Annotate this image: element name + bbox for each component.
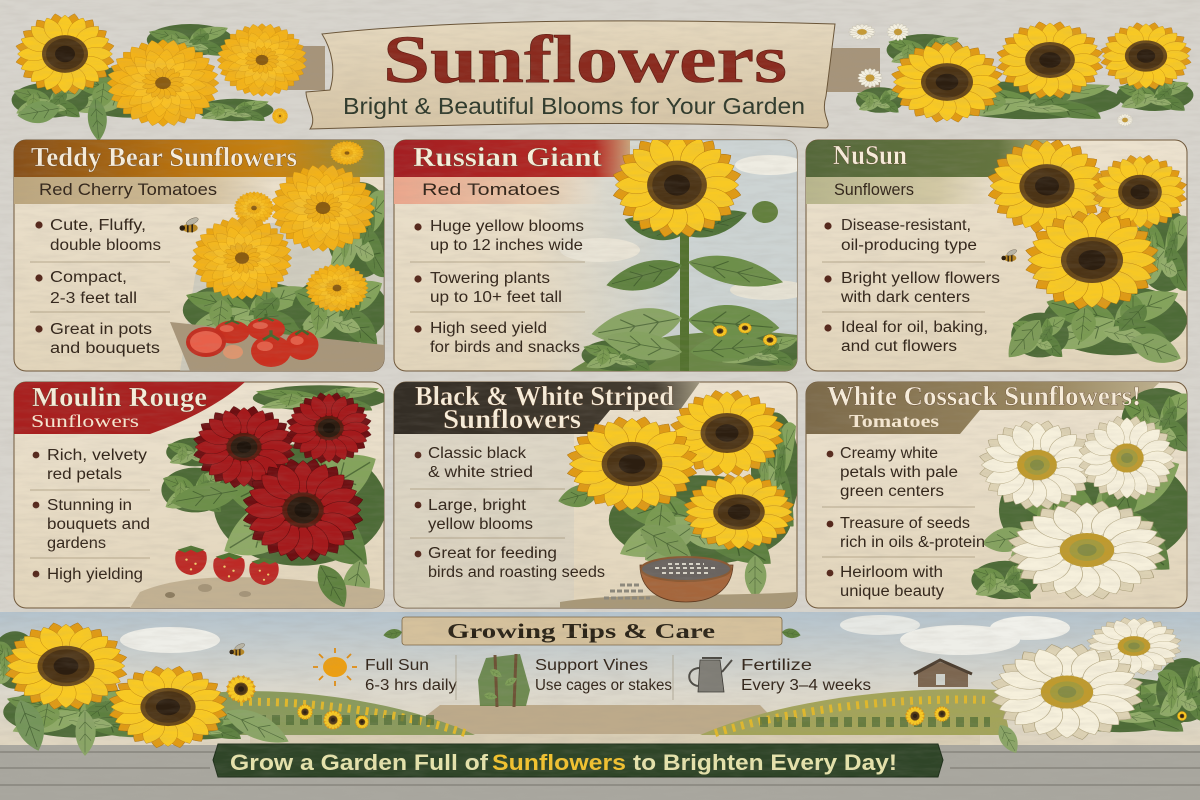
bullet list: Great in pots [50, 321, 152, 338]
bullet list: Large, bright [428, 497, 527, 514]
icon: trellis [478, 654, 530, 707]
bullet list [822, 217, 1000, 355]
bullet list: up to 12 inches wide [430, 237, 583, 254]
heading: Teddy Bear Sunflowers [31, 142, 297, 172]
panel: Teddy Bear Sunflowers [14, 139, 394, 371]
footer banner: to Brighten Every Day! [633, 750, 897, 775]
bullet list: red petals [47, 466, 122, 483]
bullet list: Towering plants [430, 270, 550, 287]
bullet list: Ideal for oil, baking, [841, 319, 988, 336]
subheading: Red Cherry Tomatoes [39, 181, 217, 199]
illustration: teddy bear blooms [170, 139, 394, 371]
bullet list: Stunning in [47, 497, 132, 514]
bullet list: Great for feeding [428, 545, 557, 562]
top-left sunflower cluster [6, 6, 315, 142]
bullet list [30, 447, 150, 583]
tip: fertilize: Every 3–4 weeks [741, 677, 871, 694]
bullet list [410, 445, 605, 581]
garden scene: growing tips backdrop [0, 612, 1200, 747]
tip: full sun [313, 648, 457, 694]
bullet list: oil-producing type [841, 237, 977, 254]
header band [14, 382, 245, 434]
bullet list: with dark centers [840, 289, 970, 306]
icon: watering can [689, 658, 732, 692]
bottom-right white flowers [977, 612, 1200, 757]
tip: full sun: 6-3 hrs daily [365, 677, 457, 694]
header band [806, 382, 1160, 434]
subheading: Sunflowers [31, 411, 139, 431]
bullet list: Bright yellow flowers [841, 270, 1000, 287]
bullet list: High yielding [47, 566, 143, 583]
bullet list: Rich, velvety [47, 447, 147, 464]
bullet list: Disease-resistant, [841, 217, 971, 234]
subheading: Sunflowers [834, 181, 914, 199]
bullet list: up to 10+ feet tall [430, 289, 562, 306]
subtitle: Bright & Beautiful Blooms for Your Garden [343, 93, 805, 119]
panel: Moulin Rouge [14, 382, 387, 616]
bullet list: 2-3 feet tall [50, 290, 137, 307]
illustration: white blooms [971, 388, 1187, 600]
top-right sunflower cluster [848, 14, 1200, 130]
header band [394, 382, 700, 434]
tip: full sun: Full Sun [365, 657, 429, 674]
bullet list [410, 218, 585, 356]
heading: Moulin Rouge [32, 382, 207, 412]
bullet list [30, 217, 170, 357]
bullet list: Heirloom with [840, 564, 943, 581]
tip: fertilize: Fertilize [741, 657, 812, 674]
heading: NuSun [833, 140, 907, 170]
tip: fertilize [689, 657, 871, 694]
wooden posts behind title banner [285, 46, 880, 92]
illustration: red blooms [130, 384, 387, 616]
bullet list: Huge yellow blooms [430, 218, 584, 235]
panel: Russian Giant [394, 140, 798, 372]
subheading: Tomatoes [849, 411, 939, 431]
footer banner: Grow a Garden Full of [230, 750, 489, 775]
banner plank [306, 21, 835, 129]
icon: sun [313, 648, 357, 686]
heading: Russian Giant [413, 142, 602, 172]
panel: NuSun [806, 130, 1196, 371]
bullet list: unique beauty [840, 583, 944, 600]
tips heading board [383, 617, 801, 645]
panel: Black & White Striped [394, 381, 805, 608]
bullet list: and bouquets [50, 340, 160, 357]
bullet list: double blooms [50, 237, 161, 254]
bullet list: High seed yield [430, 320, 547, 337]
tip: support vines: Support Vines [535, 657, 648, 674]
bullet list: birds and roasting seeds [428, 564, 605, 581]
heading: White Cossack Sunflowers! [827, 381, 1141, 411]
bullet list: Cute, Fluffy, [50, 217, 146, 234]
bottom-left sunflowers [0, 614, 294, 756]
seed bowl [640, 565, 733, 602]
bullet list: gardens [47, 535, 106, 552]
bullet list: for birds and snacks [430, 339, 580, 356]
header band [394, 140, 630, 177]
tips heading board: Growing Tips & Care [447, 619, 715, 643]
icon: farmhouse [914, 660, 972, 687]
bullet list: green centers [840, 483, 944, 500]
tip: support vines: Use cages or stakes [535, 677, 672, 694]
panel: White Cossack Sunflowers [806, 381, 1198, 609]
header band [806, 140, 1046, 177]
bullet list: & white stried [428, 464, 533, 481]
illustration: yellow blooms and seed bowl [555, 382, 805, 608]
bullet list: and cut flowers [841, 338, 957, 355]
bullet list: Treasure of seeds [840, 515, 970, 532]
footer banner: Sunflowers [492, 750, 626, 775]
footer banner [213, 744, 943, 777]
illustration: NuSun blooms [988, 140, 1187, 363]
panel: Black & White Striped: Sunflowers [443, 404, 581, 434]
illustration: tall sunflower [570, 140, 797, 371]
bullet list: Compact, [50, 269, 127, 286]
bullet list: Creamy white [840, 445, 938, 462]
heading: Black & White Striped [415, 381, 674, 411]
subheader band [806, 177, 996, 204]
bullet list: yellow blooms [428, 516, 533, 533]
bullet list: Classic black [428, 445, 526, 462]
bullet list: bouquets and [47, 516, 150, 533]
subheader band [394, 177, 582, 204]
header band [14, 140, 384, 177]
bullet list [822, 445, 985, 600]
subheader band [14, 177, 274, 204]
bottom wood floor [0, 745, 1200, 800]
subheading: Red Tomatoes [422, 181, 560, 199]
bullet list: petals with pale [840, 464, 958, 481]
main title: Sunflowers [383, 21, 787, 97]
tip: support vines [478, 654, 672, 707]
title banner [306, 21, 835, 129]
divider lines between tips [456, 655, 673, 700]
bullet list: rich in oils &-protein [840, 534, 985, 551]
